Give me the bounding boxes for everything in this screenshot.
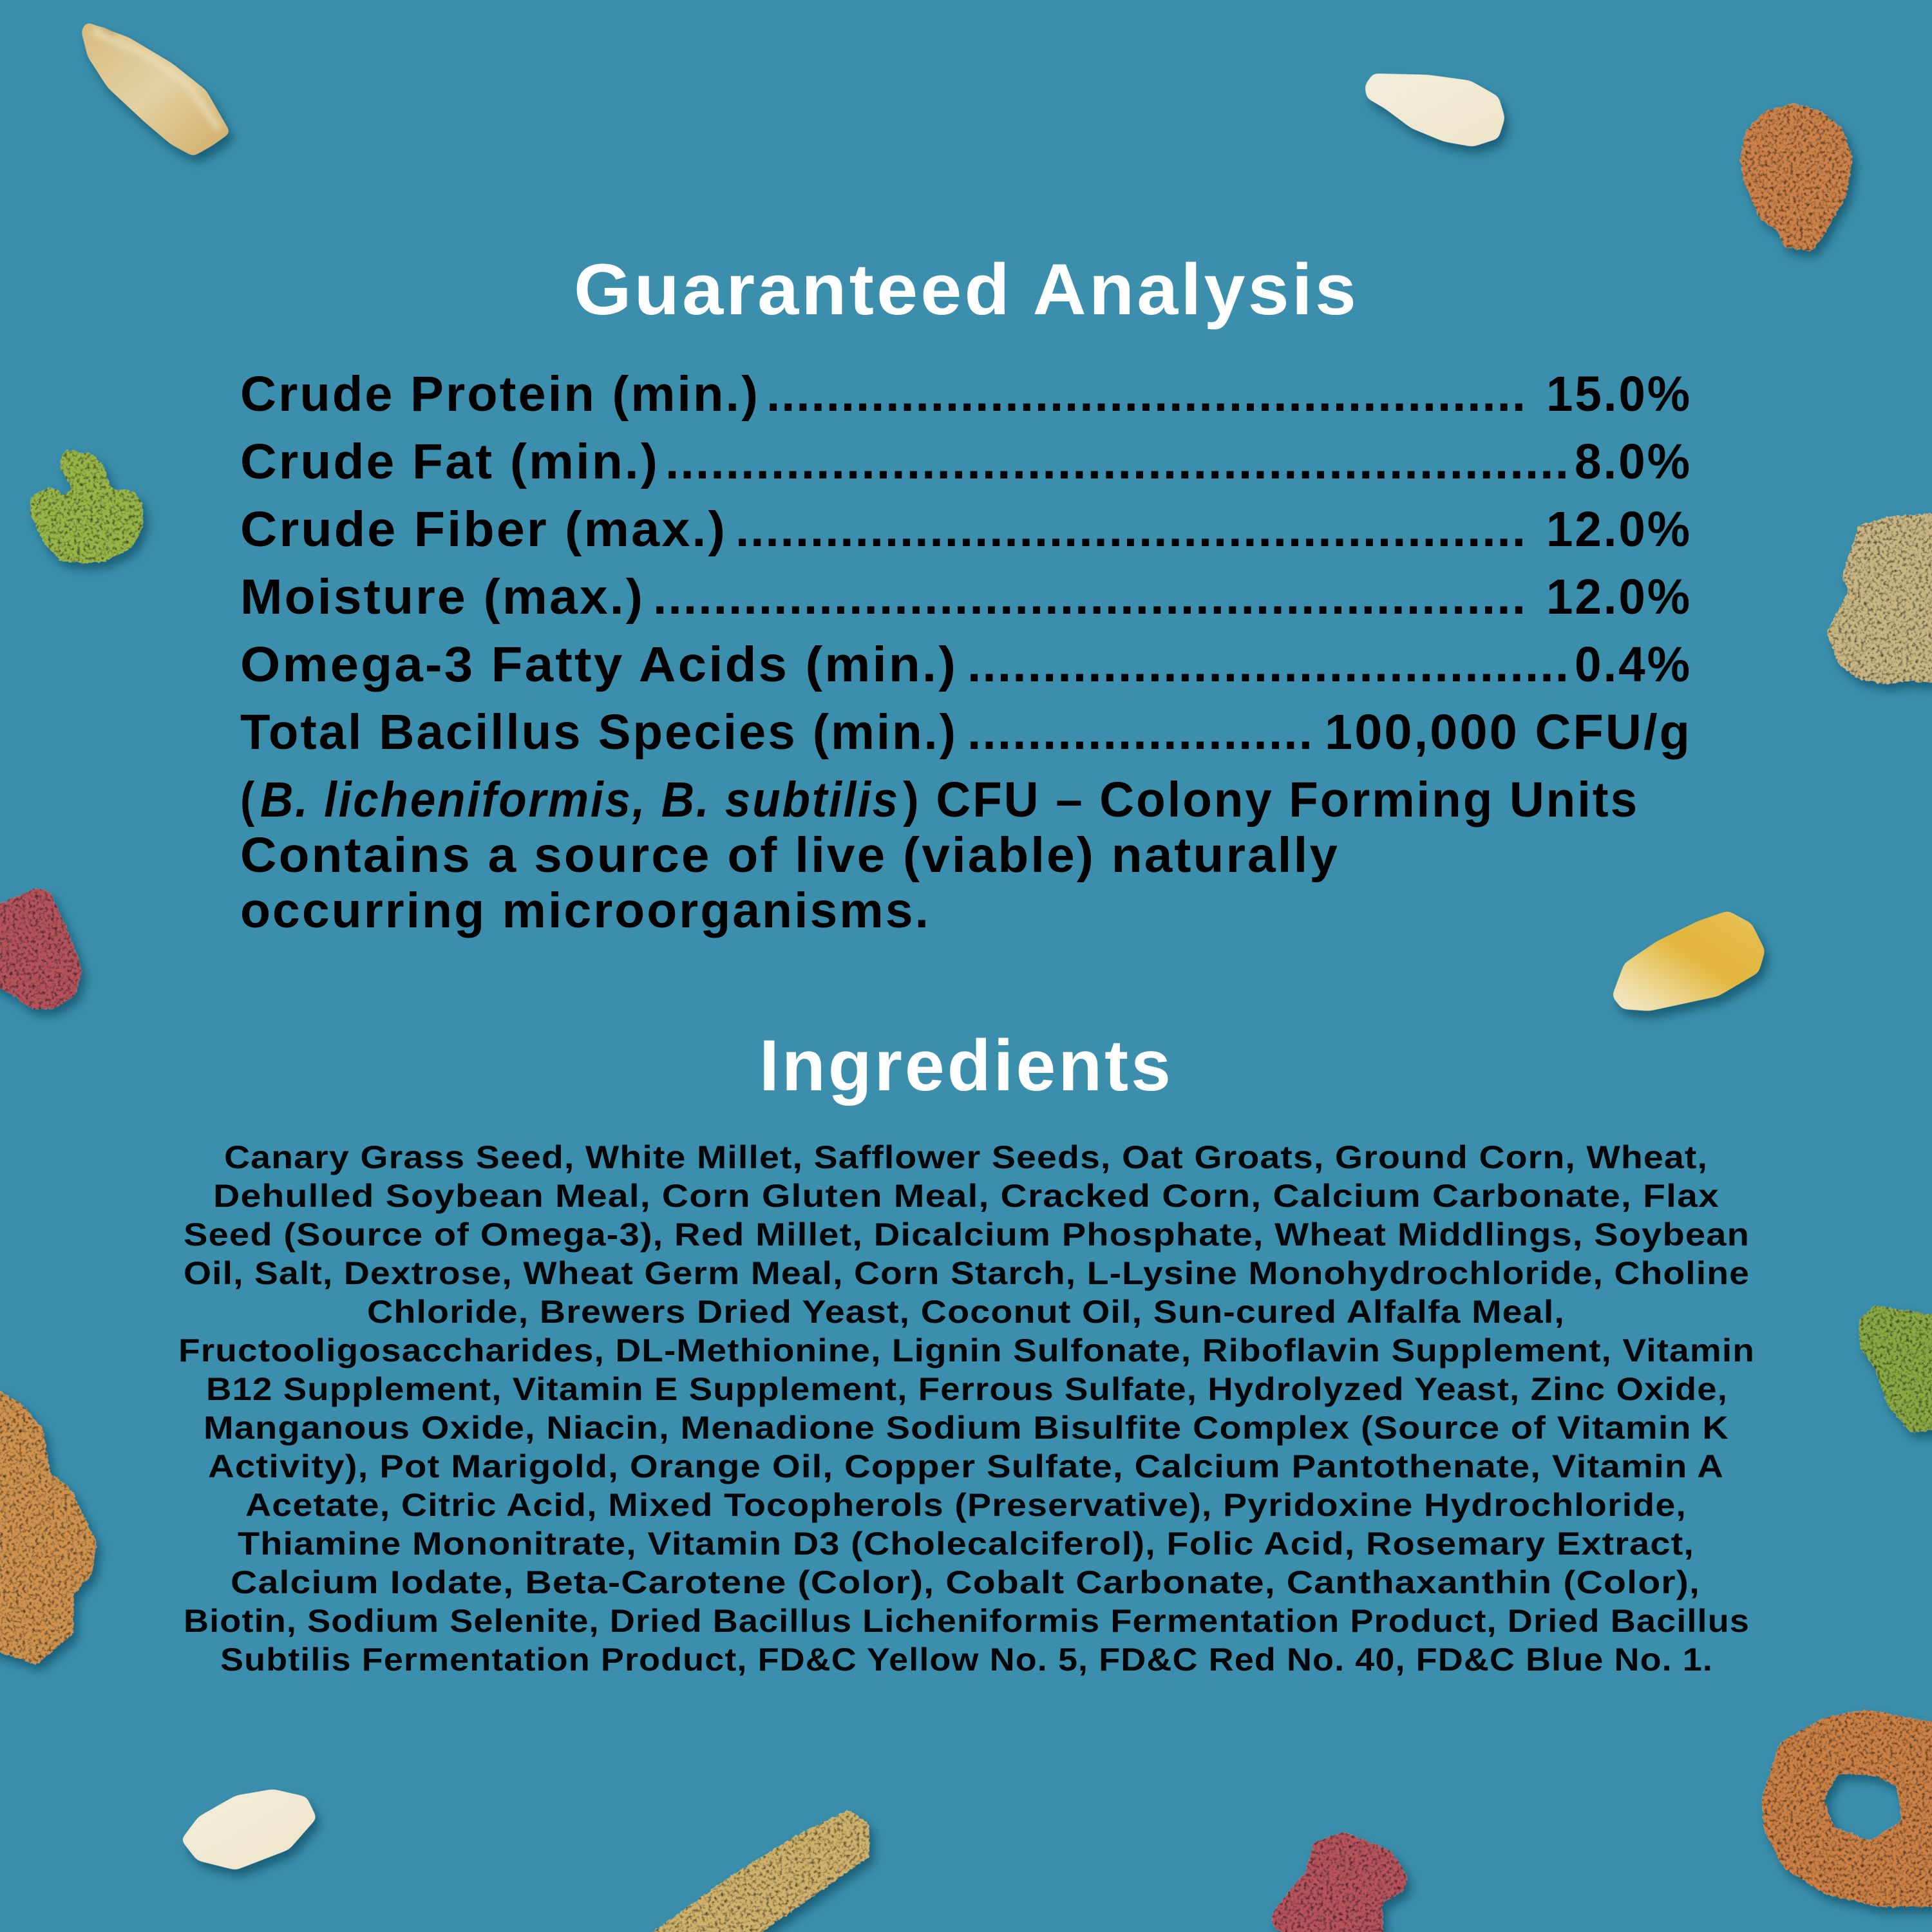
row: bacillus: Total Bacillus Species (min.) [240,705,958,760]
icon: white seed bottom left [181,1789,317,1870]
title: Ingredients: Ingredients [759,1025,1173,1106]
analysis footnote: ) CFU – Colony Forming Units [903,772,1639,828]
icon: green pellet left [30,450,143,564]
row: omega-3: ........................................ [967,637,1571,692]
icon: large orange pellet left [0,1385,97,1665]
row: omega-3: Omega-3 Fatty Acids (min.) [240,637,958,692]
icon: red pellet left [0,888,82,1009]
row: bacillus [240,705,1692,760]
row: crude fiber: 12.0% [1546,502,1692,557]
row: omega-3: 0.4% [1575,637,1692,692]
ingredients text block: Activity), Pot Marigold, Orange Oil, Copper Sulfate, Calcium Pantothenate, Vitamin A [208,1448,1724,1484]
ingredients text block: Chloride, Brewers Dried Yeast, Coconut Oil, Sun-cured Alfalfa Meal, [367,1294,1565,1330]
analysis table [240,366,1692,760]
row: crude fat: 8.0% [1575,434,1692,489]
row: moisture [240,569,1692,625]
row: crude fiber: Crude Fiber (max.) [240,502,727,557]
ingredients text block: Canary Grass Seed, White Millet, Safflower Seeds, Oat Groats, Ground Corn, Wheat, [224,1139,1708,1175]
ingredients text block [178,1139,1755,1678]
row: crude protein [240,366,1692,422]
ingredients text block: Acetate, Citric Acid, Mixed Tocopherols (Preservative), Pyridoxine Hydrochloride, [245,1487,1687,1523]
ingredients text block: Oil, Salt, Dextrose, Wheat Germ Meal, Corn Starch, L-Lysine Monohydrochloride, Choline [184,1255,1750,1291]
row: bacillus: 100,000 CFU/g [1325,705,1692,760]
analysis footnote: B. licheniformis, B. subtilis [260,772,900,828]
icon: orange pellet top right [1740,103,1853,251]
icon: tan stick bottom [634,1810,869,1932]
ingredients text block: Calcium Iodate, Beta-Carotene (Color), Cobalt Carbonate, Canthaxanthin (Color), [231,1564,1700,1600]
row: crude fat: Crude Fat (min.) [240,434,659,489]
row: moisture: 12.0% [1546,569,1692,625]
row: crude fiber [240,502,1692,557]
icon: seed husk top left [81,22,231,156]
analysis footnote: ( [240,772,256,828]
row: omega-3 [240,637,1692,692]
icon: white seed top right [1365,73,1505,147]
ingredients text block: Fructooligosaccharides, DL-Methionine, Lignin Sulfonate, Riboflavin Supplement, Vitamin [178,1332,1755,1368]
icon: orange ring bottom right [1761,1710,1932,1907]
ingredients text block: Thiamine Mononitrate, Vitamin D3 (Cholecalciferol), Folic Acid, Rosemary Extract, [238,1526,1694,1562]
row: moisture: Moisture (max.) [240,569,645,625]
row: moisture: .......................................................... [653,569,1528,625]
icon: corn kernel right [1612,911,1765,1011]
row: crude fat: ............................................................ [665,434,1571,489]
ingredients text block: Dehulled Soybean Meal, Corn Gluten Meal, Cracked Corn, Calcium Carbonate, Flax [213,1178,1719,1214]
ingredients text block: Manganous Oxide, Niacin, Menadione Sodium Bisulfite Complex (Source of Vitamin K [204,1410,1729,1446]
row: crude protein: ................................................... [766,366,1528,422]
icon: red pellet bottom [1271,1832,1408,1932]
ingredients text block: Seed (Source of Omega-3), Red Millet, Dicalcium Phosphate, Wheat Middlings, Soybean [184,1217,1750,1253]
analysis footnote: Contains a source of live (viable) naturally [240,828,1340,883]
ingredients text block: Biotin, Sodium Selenite, Dried Bacillus Licheniformis Fermentation Product, Dried Bacillus [184,1603,1750,1639]
analysis footnote [240,772,1639,938]
row: bacillus: ....................... [967,705,1314,760]
row: crude fiber: ..................................................... [735,502,1528,557]
row: crude protein: Crude Protein (min.) [240,366,760,422]
icon: tan pellet right [1826,513,1932,685]
ingredients text block: Subtilis Fermentation Product, FD&C Yellow No. 5, FD&C Red No. 40, FD&C Blue No. 1. [220,1642,1713,1678]
title: Guaranteed Analysis: Guaranteed Analysis [574,249,1359,330]
row: crude fat [240,434,1692,489]
analysis footnote: occurring microorganisms. [240,883,931,938]
icon: green pellet right [1859,1305,1932,1433]
row: crude protein: 15.0% [1546,366,1692,422]
ingredients text block: B12 Supplement, Vitamin E Supplement, Ferrous Sulfate, Hydrolyzed Yeast, Zinc Oxide, [206,1371,1728,1407]
